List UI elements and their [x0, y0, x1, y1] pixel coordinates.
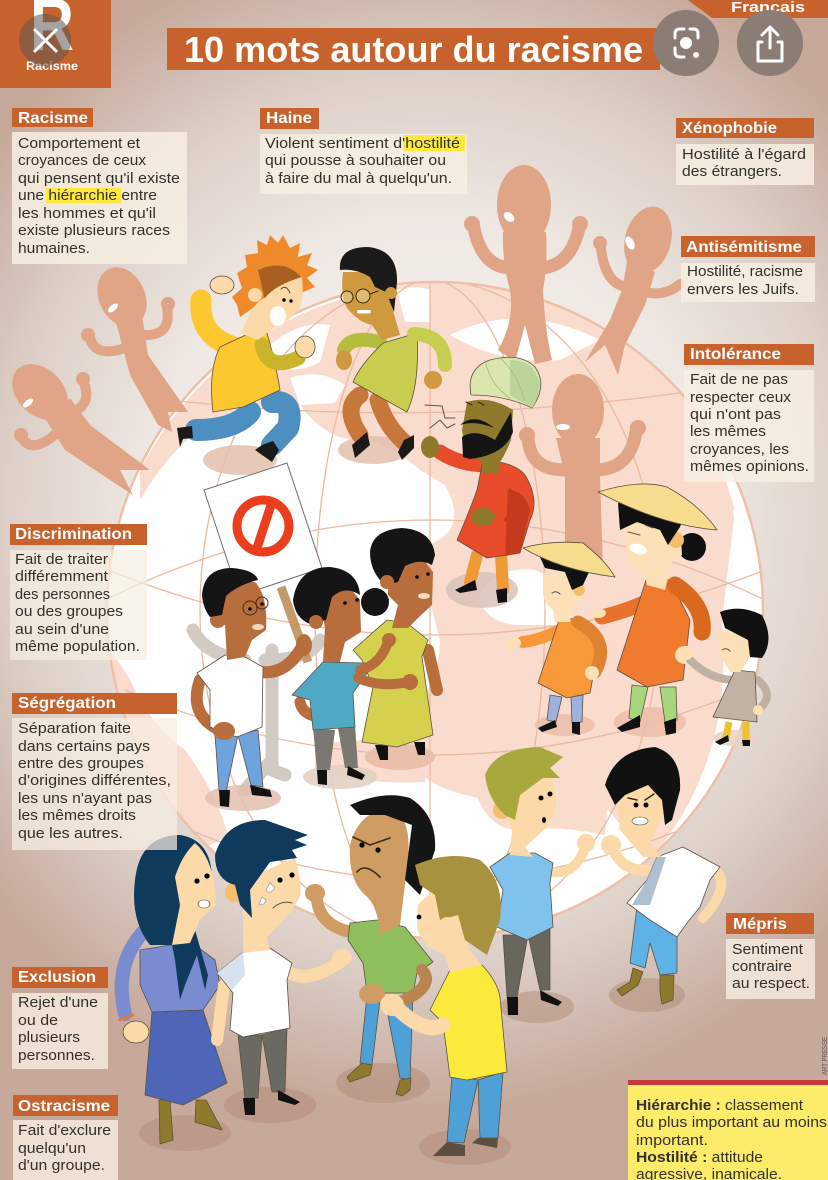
- panel: Mépris: Sentiment: [732, 942, 803, 958]
- panel: Intolérance: croyances, les: [690, 442, 789, 458]
- panel: Ostracisme: d'un groupe.: [18, 1158, 105, 1174]
- person: small child, grey robe: [679, 609, 768, 746]
- panel: Mépris: au respect.: [732, 976, 810, 992]
- panel: Mépris: contraire: [732, 959, 792, 975]
- panel: Haine: [260, 108, 467, 194]
- panel: Intolérance: mêmes opinions.: [690, 459, 809, 475]
- person: child, straw hat, orange robe: [505, 542, 615, 736]
- panel: Antisémitisme: Antisémitisme: [686, 239, 802, 256]
- panel: Exclusion: [12, 967, 108, 1069]
- panel: Racisme: une hiérarchie entre: [18, 188, 157, 204]
- panel: Ségrégation: que les autres.: [18, 826, 123, 842]
- panel: Intolérance: Fait de ne pas: [690, 372, 788, 388]
- person: angry boy, white shirt, blue shorts: [601, 747, 721, 1012]
- panel: Exclusion: Rejet d'une: [18, 995, 98, 1011]
- panel: Ségrégation: les mêmes droits: [18, 808, 136, 824]
- panel: Ségrégation: d'origines différentes,: [18, 773, 171, 789]
- glossary box: Hostilité : attitude: [636, 1150, 763, 1166]
- gray shadow figure: [193, 630, 320, 790]
- panel: Haine: à faire du mal à quelqu'un.: [265, 171, 452, 187]
- person: woman, yellow dress: [353, 528, 437, 770]
- person: mother, straw hat, orange robe: [590, 484, 717, 737]
- panel: Xénophobie: Xénophobie: [682, 120, 777, 137]
- silhouettes: [1, 165, 680, 570]
- silhouette: top right: [585, 201, 680, 375]
- glossary box: Hiérarchie : classement: [636, 1098, 803, 1114]
- silhouette mouths: [21, 210, 637, 430]
- panel: Discrimination: Discrimination: [15, 526, 132, 543]
- person: orange spiky hair, yellow shirt: [177, 235, 318, 475]
- panel: Ostracisme: Ostracisme: [18, 1098, 110, 1115]
- panel: Ségrégation: les uns n'ayant pas: [18, 791, 152, 807]
- panel: Racisme: Racisme: [18, 110, 88, 127]
- person: woman with long hair, blue skirt: [120, 835, 231, 1151]
- panel: Racisme: [12, 108, 187, 264]
- globe: [105, 280, 765, 940]
- panel: Discrimination: des personnes: [15, 587, 110, 603]
- panel: Antisémitisme: Hostilité, racisme: [687, 264, 803, 280]
- panel: Ségrégation: Séparation faite: [18, 721, 131, 737]
- panel: Ostracisme: Fait d'exclure: [18, 1123, 111, 1139]
- panel: Intolérance: qui n'ont pas: [690, 407, 781, 423]
- panel: Antisémitisme: envers les Juifs.: [687, 282, 799, 298]
- legs: [196, 402, 290, 445]
- panel: Xénophobie: des étrangers.: [682, 164, 782, 180]
- panel: Xénophobie: [676, 118, 814, 185]
- panel: Ségrégation: entre des groupes: [18, 756, 144, 772]
- panel: Ostracisme: [13, 1095, 118, 1180]
- panel: Discrimination: au sein d'une: [15, 622, 109, 638]
- shout marks: [425, 405, 455, 428]
- subject tab: [688, 0, 828, 18]
- panel: Discrimination: même population.: [15, 639, 140, 655]
- silhouette: top center: [464, 165, 588, 364]
- panel: Exclusion: ou de: [18, 1013, 58, 1029]
- panel: Intolérance: Intolérance: [690, 346, 781, 363]
- panel: Discrimination: Fait de traiter: [15, 552, 108, 568]
- top left badge: Racisme: [26, 61, 78, 73]
- panel: Haine: Haine: [266, 110, 312, 127]
- top left badge: [0, 0, 111, 88]
- glossary box: important.: [636, 1133, 708, 1149]
- panel: Discrimination: [10, 524, 147, 660]
- face: [240, 277, 303, 340]
- panel: Exclusion: plusieurs: [18, 1030, 80, 1046]
- panel: Racisme: qui pensent qu'il existe: [18, 171, 180, 187]
- panel: Haine: qui pousse à souhaiter ou: [265, 153, 446, 169]
- person: blond, light-blue shirt: [485, 747, 595, 1023]
- panel: Racisme: les hommes et qu'il: [18, 206, 156, 222]
- panel: Racisme: humaines.: [18, 241, 90, 257]
- panel: Ségrégation: Ségrégation: [18, 695, 116, 712]
- shirt: [201, 300, 238, 348]
- panel: Haine: Violent sentiment d'hostilité: [265, 136, 460, 152]
- panel: Intolérance: les mêmes: [690, 424, 766, 440]
- panel: Exclusion: personnes.: [18, 1048, 95, 1064]
- panel: Xénophobie: Hostilité à l'égard: [682, 147, 806, 163]
- panel: Discrimination: différemment: [15, 569, 108, 585]
- icon: share button: [737, 10, 803, 76]
- panel: Exclusion: Exclusion: [18, 969, 96, 986]
- panel: Mépris: Mépris: [733, 916, 787, 933]
- glossary box: du plus important au moins: [636, 1115, 827, 1131]
- icon: close button: [19, 14, 71, 66]
- title banner: 10 mots autour du racisme: [184, 29, 643, 70]
- glossary box: [628, 1080, 828, 1180]
- panel: Racisme: croyances de ceux: [18, 153, 147, 169]
- panel: Antisémitisme: [681, 236, 815, 302]
- silhouette: far left: [1, 353, 150, 495]
- person: angry man, green shirt: [305, 795, 435, 1103]
- panel: Racisme: existe plusieurs races: [18, 223, 170, 239]
- panel: Discrimination: ou des groupes: [15, 604, 123, 620]
- silhouette: upper left: [81, 259, 188, 432]
- panel: Ségrégation: [12, 693, 177, 850]
- person: crying boy, white shirt: [215, 820, 352, 1123]
- person: glasses, white T-shirt: [197, 568, 312, 811]
- person: blond man from behind, yellow shirt: [380, 856, 511, 1165]
- silhouette: center right: [519, 374, 646, 570]
- panel: Ostracisme: quelqu'un: [18, 1141, 86, 1157]
- panel: Intolérance: [684, 344, 814, 482]
- panel: Racisme: Comportement et: [18, 136, 140, 152]
- icon: lens button: [653, 10, 719, 76]
- panel: Intolérance: respecter ceux: [690, 390, 792, 406]
- panel: Mépris: [726, 913, 815, 999]
- person: glasses, olive shirt: [336, 247, 445, 464]
- person: blue shirt: [292, 567, 418, 789]
- panel: Ségrégation: dans certains pays: [18, 739, 150, 755]
- hair: [232, 235, 318, 317]
- sign: [204, 463, 322, 662]
- person: turban, red robe: [421, 357, 541, 608]
